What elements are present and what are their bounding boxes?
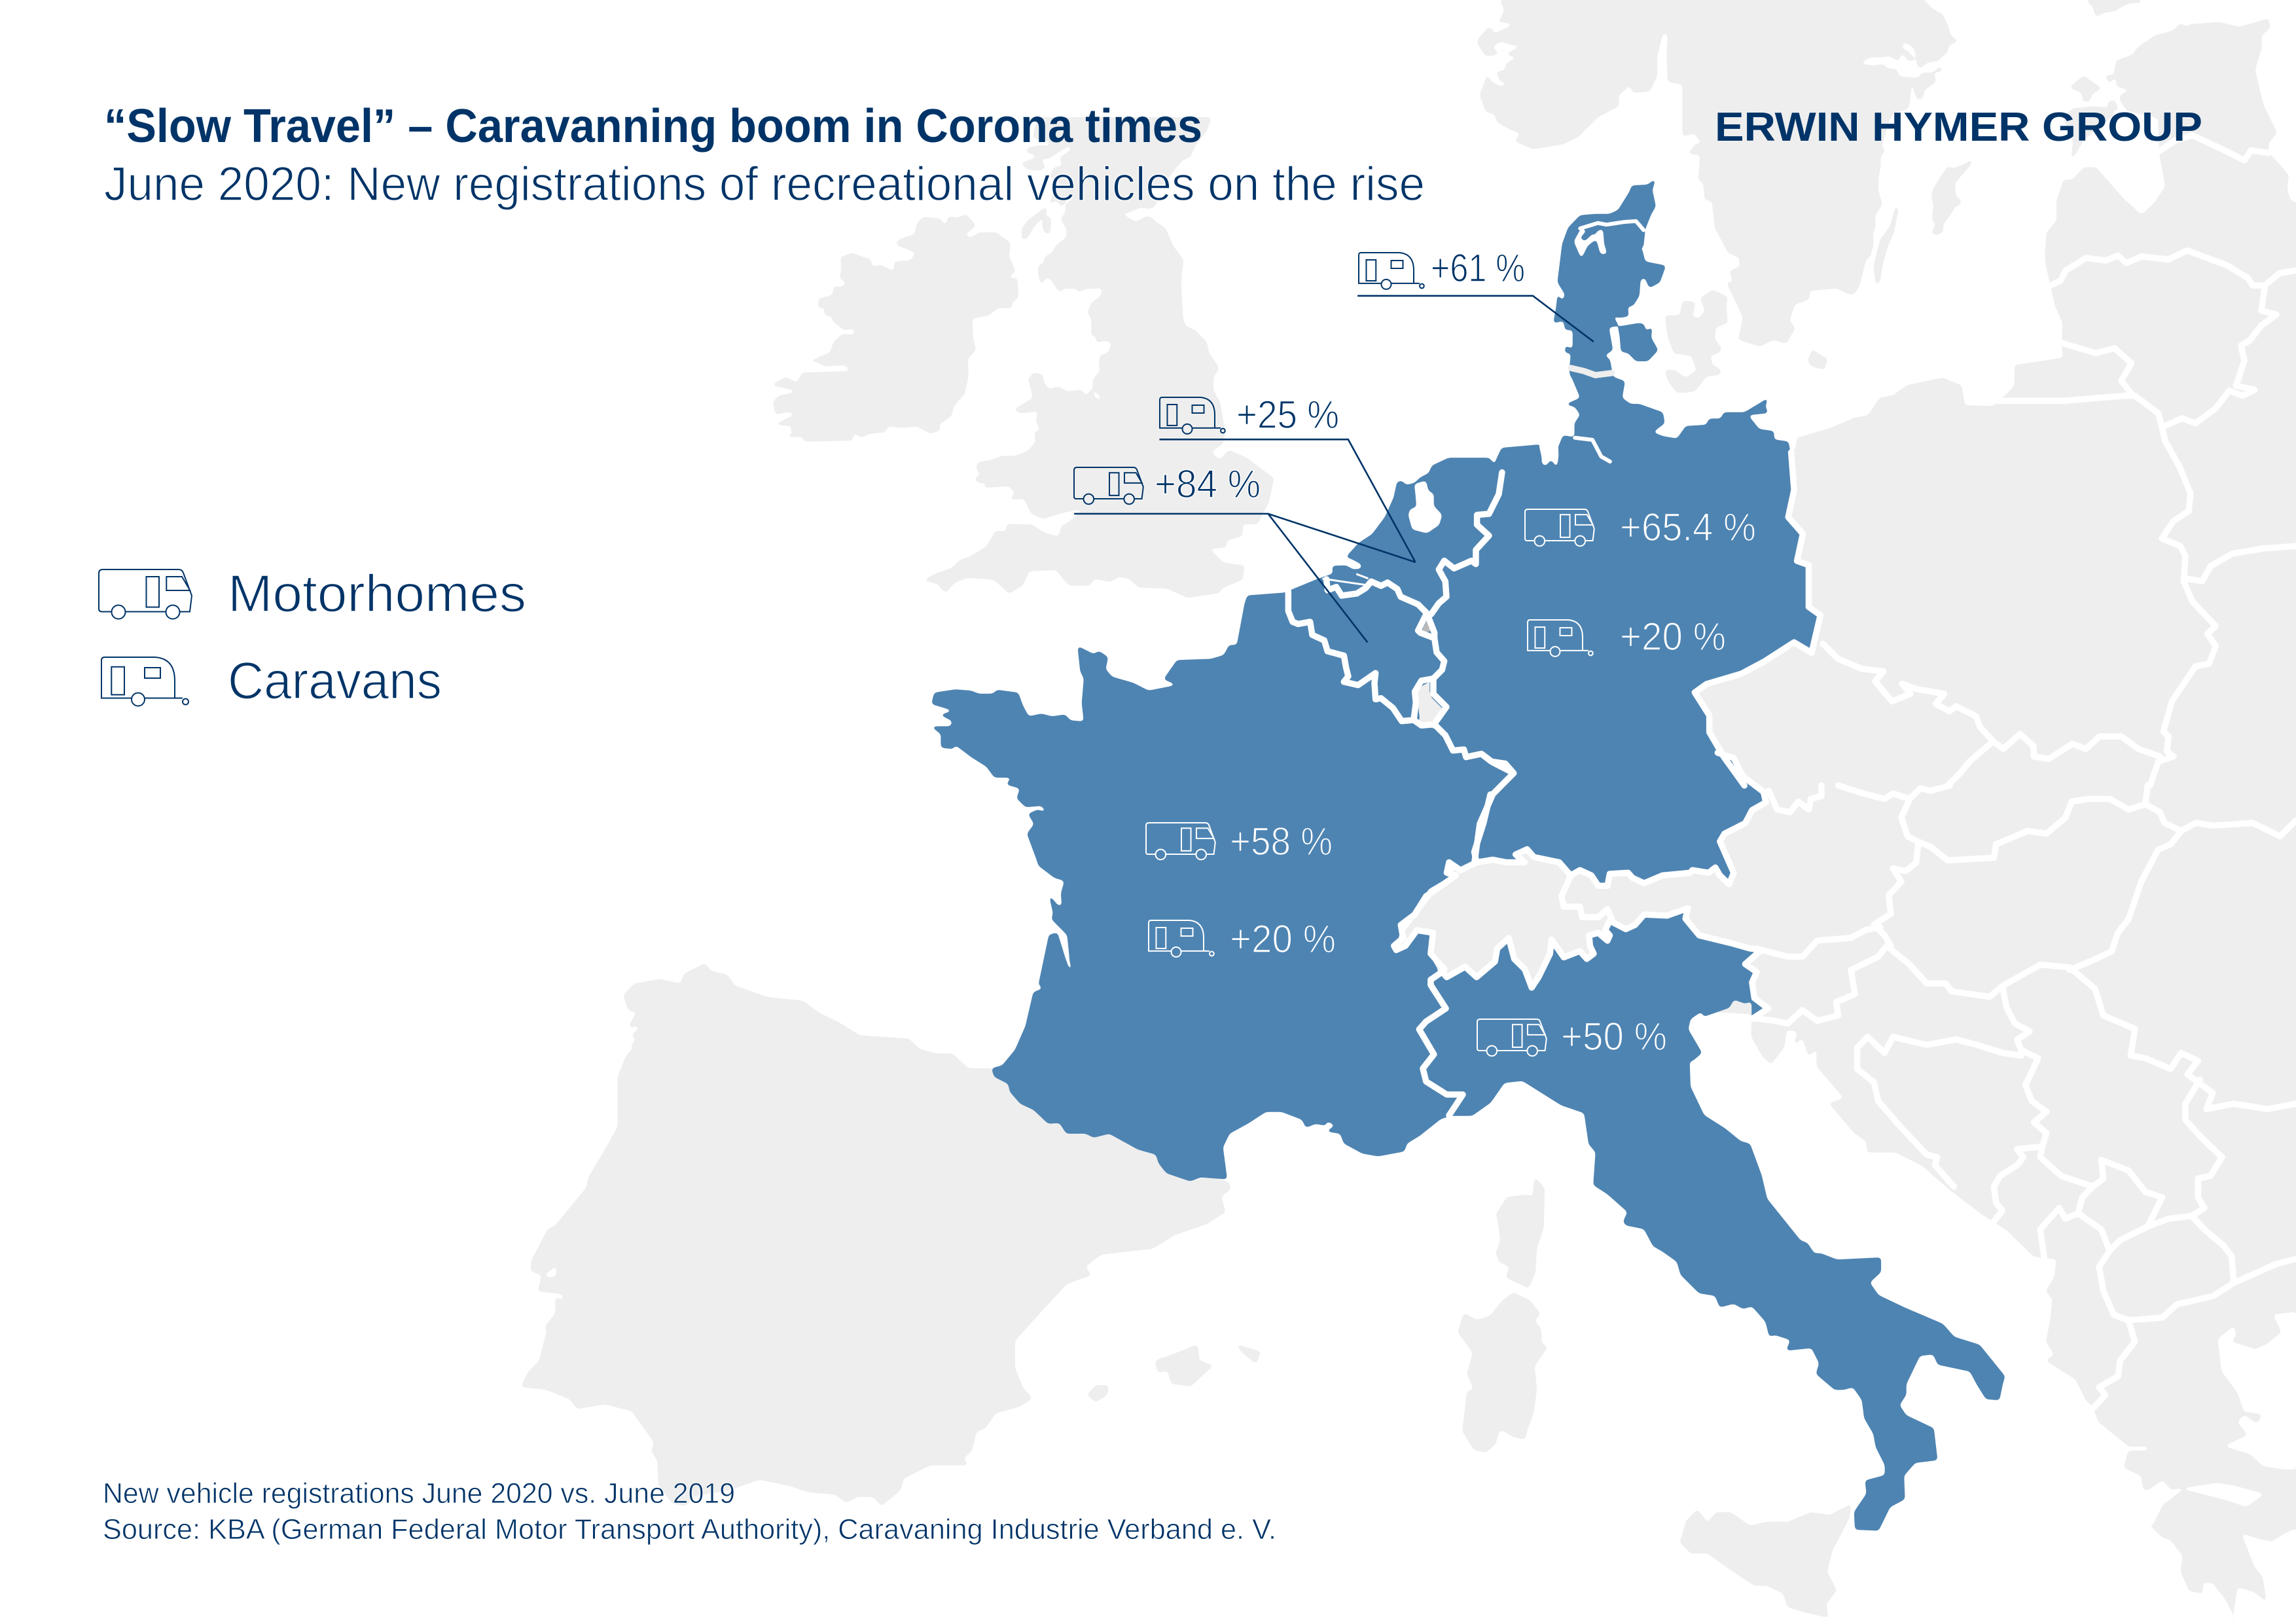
callout: Netherlands and Belgium motorhomes +84 %: +84 % [1155,462,1261,506]
label: Germany caravans +20 %: +20 % [1620,615,1726,659]
label: Italy motorhomes +50 % [1477,1015,1667,1058]
icon: caravan legend [101,657,188,706]
source note: New vehicle registrations June 2020 vs. June 2019 [103,1477,735,1509]
land: Scotland [1022,118,1211,288]
land: Czech Republic [1636,622,1780,825]
legend label: motorhomes: Motorhomes [228,564,526,623]
callout: Netherlands and Belgium motorhomes +84 % [1074,462,1416,642]
inlet: Jade Bight [1539,444,1558,467]
source note: Source: KBA (German Federal Motor Transport Authority), Caravaning Industrie Verband e. V. [103,1513,1276,1545]
label: Germany motorhomes +65.4 %: +65.4 % [1620,505,1756,549]
source note [103,1477,1276,1545]
legend [99,564,526,710]
land: Alpine countries [1394,753,2029,1014]
callout: Netherlands caravans +25 %: +25 % [1236,393,1339,437]
land: Balkans and Greece [1721,785,2296,1624]
land: Sicily [1681,1505,1851,1617]
title: “Slow Travel” – Caravanning boom in Corona times [104,100,1202,153]
country: Italy [1419,909,2005,1530]
inlet: Limfjord fingers [1574,228,1607,258]
lake: IJsselmeer [1408,481,1442,533]
callout: Denmark caravans +61 % [1357,246,1594,342]
land: Ireland [772,215,1018,441]
label: France caravans +20 % [1149,917,1336,961]
land: Sweden east, Gotland, Oeland and Estonian islands [1800,0,2142,302]
country: Germany north and centre [1437,369,1820,785]
subtitle: June 2020: New registrations of recreational vehicles on the rise [104,158,1425,211]
legend label: caravans: Caravans [228,651,442,710]
map: grey surrounding European countries [522,0,2296,1624]
label: France caravans +20 %: +20 % [1230,917,1336,961]
country: Germany south [1475,753,1766,886]
country: Netherlands and Belgium [1286,458,1503,729]
land: Corsica and Sardinia [1458,1178,1547,1452]
callout: Netherlands caravans +25 % [1159,393,1416,562]
callout: Denmark caravans +61 %: +61 % [1431,246,1525,290]
label: Germany caravans +20 % [1528,615,1726,659]
land: Iberian Peninsula [522,964,1260,1506]
label: France motorhomes +58 % [1146,820,1333,863]
map: white national borders of eastern Europe [1562,135,2296,1409]
country: France [932,592,1514,1181]
country: Denmark [1554,179,1666,378]
label: France motorhomes +58 %: +58 % [1230,820,1333,863]
map: white seas and inlets cut into the grey land [545,43,2296,1624]
land: Baltics, Poland and eastern Europe [1767,19,2296,785]
icon: motorhome legend [99,569,192,619]
label: Italy motorhomes +50 %: +50 % [1561,1015,1667,1058]
map: Luxembourg, enclave and white borders of the highlighted countries [1288,221,1820,1115]
label: Germany motorhomes +65.4 % [1525,505,1756,549]
map: white lakes and inlets in the blue countries [1408,228,1607,533]
map: highlighted countries in blue [932,179,2005,1530]
logo: Erwin Hymer Group: ERWIN HYMER GROUP [1715,105,2202,150]
land: Great Britain south [925,201,1274,598]
land: Norway and Sweden west [1477,0,1924,392]
